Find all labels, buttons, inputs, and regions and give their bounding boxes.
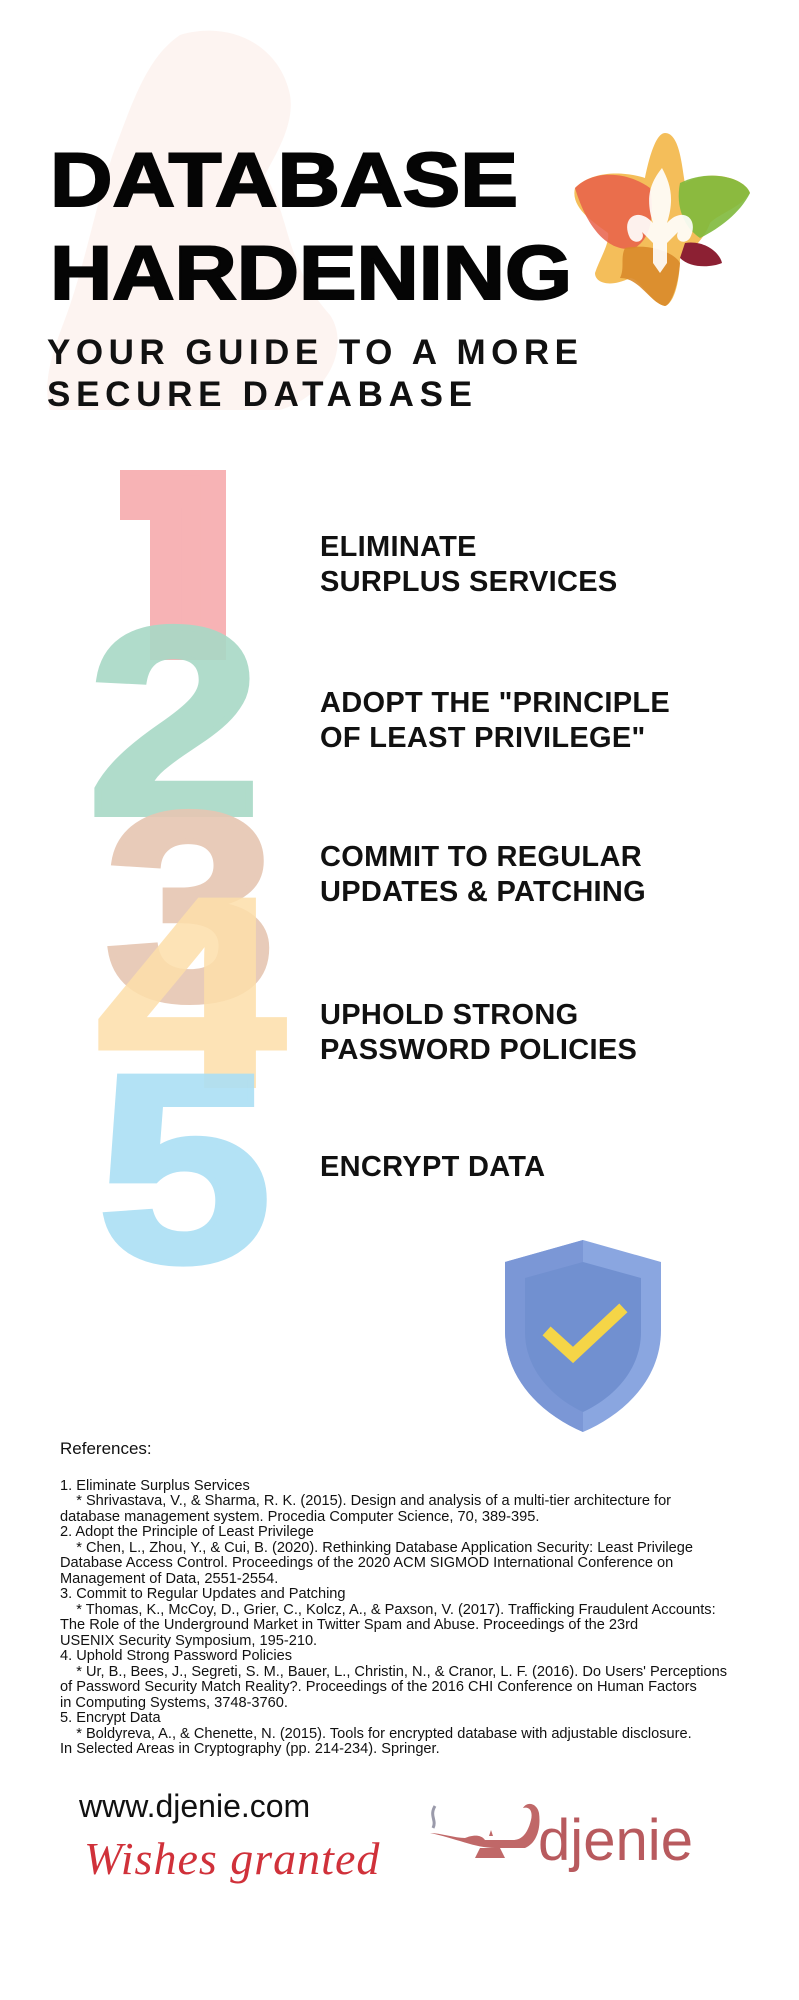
references: Management of Data, 2551-2554. [60, 1570, 278, 1586]
title: SECURE DATABASE [47, 375, 472, 414]
references: 2. Adopt the Principle of Least Privilege [60, 1524, 314, 1540]
footer tagline: Wishes granted [84, 1833, 380, 1884]
item 3: COMMIT TO REGULAR [320, 841, 642, 873]
item 5: ENCRYPT DATA [320, 1151, 545, 1183]
item 1: ELIMINATE [320, 531, 477, 563]
item 2 [320, 687, 670, 754]
footer website: www.djenie.com [79, 1788, 310, 1824]
big numbers: 2 [87, 571, 262, 871]
item 3 [320, 841, 646, 908]
references: * Thomas, K., McCoy, D., Grier, C., Kolcz, A., & Paxson, V. (2017). Trafficking Fraudulent Accounts: [76, 1602, 716, 1618]
item 1 [320, 531, 618, 598]
references: * Ur, B., Bees, J., Segreti, S. M., Bauer, L., Christin, N., & Cranor, L. F. (2016). Do Users' Perceptions [76, 1664, 727, 1680]
number 1 [120, 417, 226, 717]
icon: shield [505, 1240, 661, 1432]
title: YOUR GUIDE TO A MORE [47, 333, 578, 372]
big numbers: 3 [104, 756, 277, 1056]
item 3: UPDATES & PATCHING [320, 876, 646, 908]
big numbers [87, 455, 287, 1285]
logo: djenie lamp [430, 1804, 693, 1873]
references: 1. Eliminate Surplus Services [60, 1478, 250, 1494]
references: * Shrivastava, V., & Sharma, R. K. (2015). Design and analysis of a multi-tier architecture for [76, 1493, 671, 1509]
references: The Role of the Underground Market in Twitter Spam and Abuse. Proceedings of the 23rd [60, 1617, 638, 1633]
references: In Selected Areas in Cryptography (pp. 214-234). Springer. [60, 1741, 440, 1757]
references: Database Access Control. Proceedings of the 2020 ACM SIGMOD International Conference on [60, 1555, 673, 1571]
references: database management system. Procedia Computer Science, 70, 389-395. [60, 1508, 539, 1524]
item 2: OF LEAST PRIVILEGE" [320, 722, 646, 754]
references: of Password Security Match Reality?. Proceedings of the 2016 CHI Conference on Human Factors [60, 1679, 697, 1695]
item 4: PASSWORD POLICIES [320, 1034, 637, 1066]
references: * Boldyreva, A., & Chenette, N. (2015). Tools for encrypted database with adjustable disclosure. [76, 1726, 692, 1742]
logo: djenie lamp: djenie [538, 1808, 693, 1873]
references: References: [60, 1439, 152, 1458]
item 2: ADOPT THE "PRINCIPLE [320, 687, 670, 719]
big numbers: 4 [97, 842, 287, 1142]
title: DATABASE [50, 140, 518, 223]
title [47, 140, 578, 414]
title: HARDENING [50, 231, 572, 316]
references: 4. Uphold Strong Password Policies [60, 1648, 292, 1664]
item 4: UPHOLD STRONG [320, 999, 578, 1031]
references: in Computing Systems, 3748-3760. [60, 1694, 288, 1710]
item 1: SURPLUS SERVICES [320, 566, 618, 598]
background genie figure [48, 30, 338, 410]
references: * Chen, L., Zhou, Y., & Cui, B. (2020). Rethinking Database Application Security: Least Privilege [76, 1540, 693, 1556]
references: 5. Encrypt Data [60, 1710, 161, 1726]
logo: fleur de lis star [574, 133, 750, 306]
references: USENIX Security Symposium, 195-210. [60, 1632, 317, 1648]
item 4 [320, 999, 637, 1066]
references [60, 1439, 727, 1757]
references: 3. Commit to Regular Updates and Patching [60, 1586, 346, 1602]
